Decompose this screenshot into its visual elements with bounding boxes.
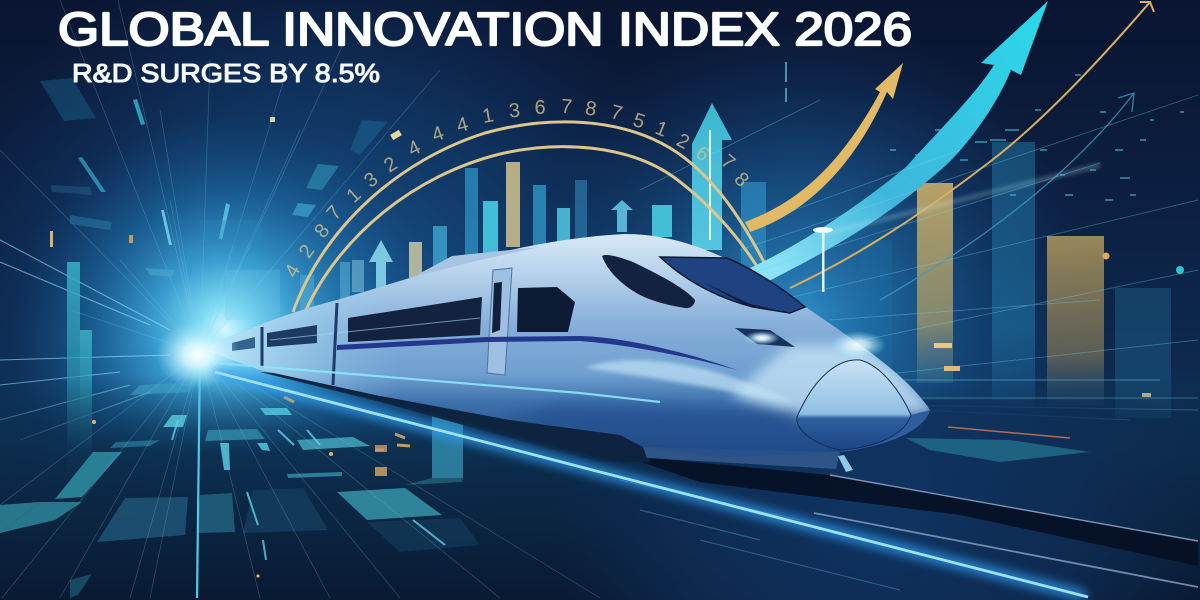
arc numbers: 6 bbox=[534, 97, 546, 119]
arc numbers: 6 bbox=[692, 142, 713, 166]
central glow bbox=[156, 321, 240, 389]
door bbox=[487, 268, 512, 375]
flank highlight bbox=[585, 360, 795, 405]
rails bbox=[620, 455, 1198, 590]
arc numbers: 5 bbox=[630, 109, 648, 133]
arc numbers: 8 bbox=[730, 168, 753, 191]
right floor streaks bbox=[906, 427, 1090, 462]
skirt bbox=[643, 447, 840, 469]
arc numbers: 2 bbox=[673, 129, 693, 154]
car side windows front bbox=[348, 297, 482, 342]
lower dark flank bbox=[520, 402, 818, 456]
lower belt line bbox=[213, 363, 660, 402]
speed light beam bbox=[215, 372, 1088, 597]
cab window bbox=[602, 255, 695, 308]
floor base bbox=[0, 375, 1200, 600]
car side windows rear bbox=[232, 337, 255, 351]
background bar chart behind train bbox=[300, 103, 766, 315]
arc numbers: 2 bbox=[295, 241, 319, 262]
undercarriage bbox=[260, 372, 650, 462]
thin blue trend arrow bbox=[880, 93, 1134, 300]
nose cone bbox=[797, 360, 911, 450]
perspective floor bbox=[0, 353, 600, 598]
foreground bar chart right bbox=[860, 142, 1171, 418]
nose tip underside bbox=[840, 410, 930, 452]
cab side window bbox=[517, 287, 575, 332]
nose shoulder highlight bbox=[730, 345, 935, 420]
body shading soft bbox=[500, 345, 935, 458]
arc numbers: 3 bbox=[360, 168, 382, 192]
arc numbers: 7 bbox=[560, 96, 573, 118]
subtitle: R&D SURGES BY 8.5% bbox=[72, 58, 380, 88]
arc numbers: 1 bbox=[652, 117, 671, 142]
title: GLOBAL INNOVATION INDEX 2026 bbox=[58, 3, 912, 55]
lens flare bbox=[830, 331, 886, 359]
arc numbers: 4 bbox=[454, 113, 471, 137]
arc numbers: 4 bbox=[405, 136, 424, 161]
light streaks and specks right bbox=[640, 62, 1198, 420]
windshield bbox=[660, 257, 805, 313]
arc numbers: 7 bbox=[608, 101, 625, 125]
floating data panels left bbox=[40, 78, 402, 502]
arc numbers: 8 bbox=[584, 97, 598, 121]
gold growth arrow bbox=[745, 63, 903, 232]
gold arc rings bbox=[293, 122, 767, 312]
window reflection bbox=[270, 318, 480, 340]
arc numbers: 8 bbox=[310, 220, 334, 242]
headlight beam bbox=[744, 331, 780, 345]
rear fade into light bbox=[210, 282, 400, 398]
arc numbers bbox=[280, 96, 753, 281]
door window bbox=[492, 282, 502, 333]
arc numbers: 7 bbox=[323, 201, 346, 224]
arc numbers: 4 bbox=[429, 122, 447, 147]
blue stripe bbox=[337, 336, 737, 370]
cyan growth arrow bbox=[750, 1, 1048, 283]
bright left rays bbox=[0, 240, 170, 440]
coupler tab bbox=[838, 455, 853, 472]
thin gold trend line bbox=[790, 2, 1154, 288]
train body bbox=[210, 234, 930, 458]
lamp post bbox=[813, 227, 833, 292]
arc numbers: 2 bbox=[380, 153, 401, 177]
arc numbers: 1 bbox=[342, 184, 365, 207]
headlight bbox=[735, 328, 795, 347]
roof fairing bbox=[413, 247, 540, 277]
arc numbers: 7 bbox=[717, 150, 739, 174]
windshield glare bbox=[703, 282, 785, 312]
car side windows middle bbox=[267, 325, 317, 347]
arc numbers: 1 bbox=[481, 104, 495, 128]
arc numbers: 3 bbox=[508, 100, 521, 122]
car gaps bbox=[262, 303, 337, 385]
bullet train bbox=[210, 234, 935, 472]
radial speed lines bbox=[0, 0, 440, 353]
arc numbers: 4 bbox=[280, 261, 305, 281]
